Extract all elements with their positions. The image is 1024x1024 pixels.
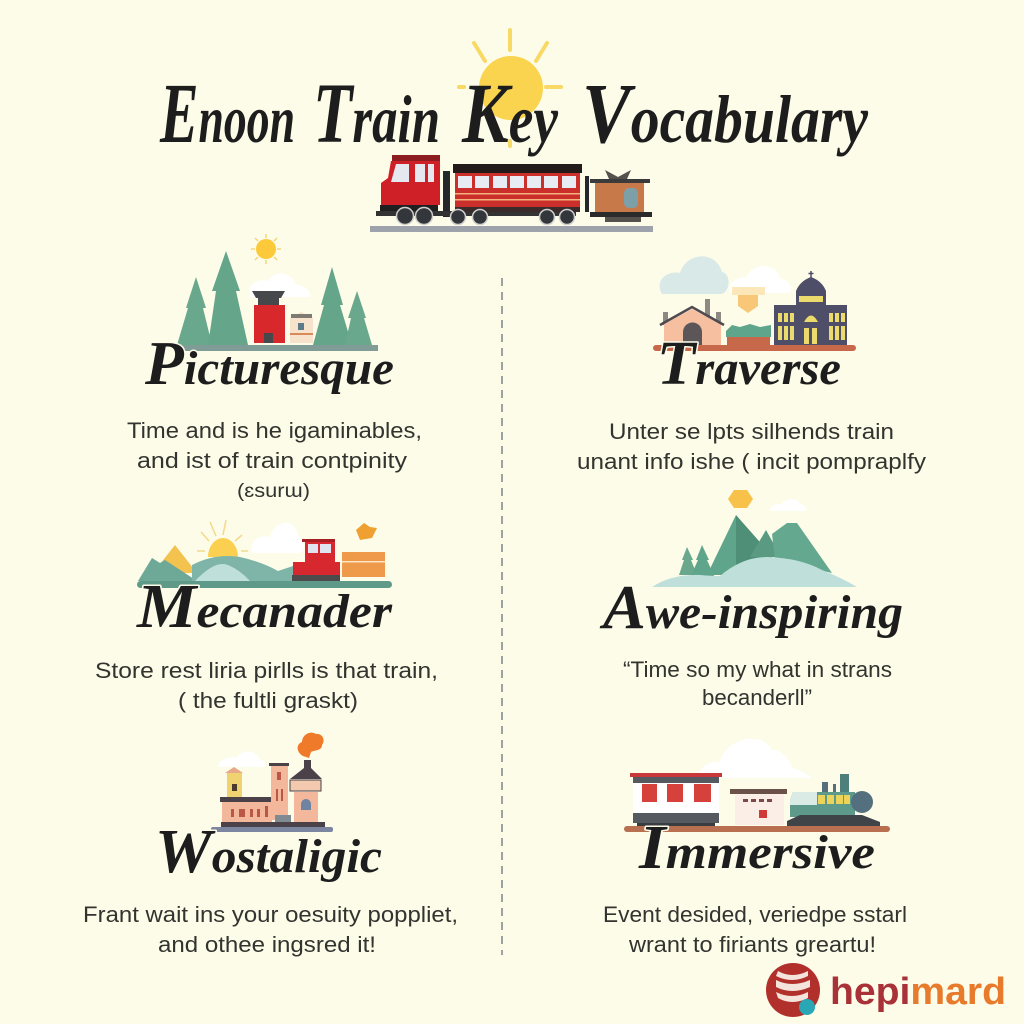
word: Picturesque: Picturesque (144, 330, 394, 398)
word: Traverse: Traverse (657, 330, 841, 398)
description: Awe-inspiring: becanderll” (702, 685, 812, 710)
description: Meander: ( the fultli graskt) (178, 688, 358, 713)
description: Traverse (577, 419, 926, 474)
description: Meander: Store rest liria pirlls is that train, (95, 658, 438, 683)
word: Meander: Mecanader (136, 573, 393, 641)
illustration: house and church (653, 256, 856, 351)
logo: hepimard (766, 963, 1006, 1017)
icon: header sun (459, 30, 561, 146)
description: Picturesque: (ɛsurɯ) (237, 481, 310, 502)
description: Traverse: Unter se lpts silhends train (609, 419, 894, 444)
illustration: train at station (624, 739, 890, 832)
illustration: forest and station (176, 234, 378, 351)
title: Enoon (159, 65, 295, 161)
title: Vocabulary (582, 65, 869, 161)
word: Nostalgic: Wostaligic (155, 818, 382, 886)
description: Picturesque: Time and is he igaminables, (127, 418, 422, 443)
panel: Immersive (603, 739, 907, 957)
description: Traverse: unant info ishe ( incit pompraplfy (577, 449, 926, 474)
divider (501, 278, 503, 955)
description: Nostalgic: and othee ingsred it! (158, 932, 376, 957)
panel: Nostalgic (83, 733, 458, 957)
description: Immersive (603, 902, 907, 957)
icon: logo mark (766, 963, 820, 1017)
panel: Picturesque (127, 234, 422, 502)
description: Meander (95, 658, 438, 713)
illustration: header train (370, 155, 653, 232)
title: Train (313, 65, 440, 161)
wordmark: hepimard (830, 971, 1006, 1013)
panel: Awe-inspiring (599, 490, 903, 710)
description: Immersive: Event desided, veriedpe sstarl (603, 902, 907, 927)
description: Awe-inspiring (623, 657, 892, 710)
illustration: hills and train (137, 520, 392, 588)
description: Nostalgic (83, 902, 458, 957)
word: Immersive: Immersive (638, 814, 875, 882)
illustration: old factory (211, 733, 333, 832)
panel: Traverse (577, 256, 926, 474)
title (159, 65, 869, 161)
word: Awe-inspiring: Awe-inspiring (599, 574, 903, 642)
description: Awe-inspiring: “Time so my what in strans (623, 657, 892, 682)
panel: Meander (95, 520, 438, 713)
illustration: mountains (652, 490, 857, 587)
description: Picturesque: and ist of train contpinity (137, 448, 407, 473)
description: Immersive: wrant to firiants greartu! (628, 932, 876, 957)
description: Picturesque (127, 418, 422, 502)
description: Nostalgic: Frant wait ins your oesuity poppliet, (83, 902, 458, 927)
title: Key (461, 65, 559, 161)
